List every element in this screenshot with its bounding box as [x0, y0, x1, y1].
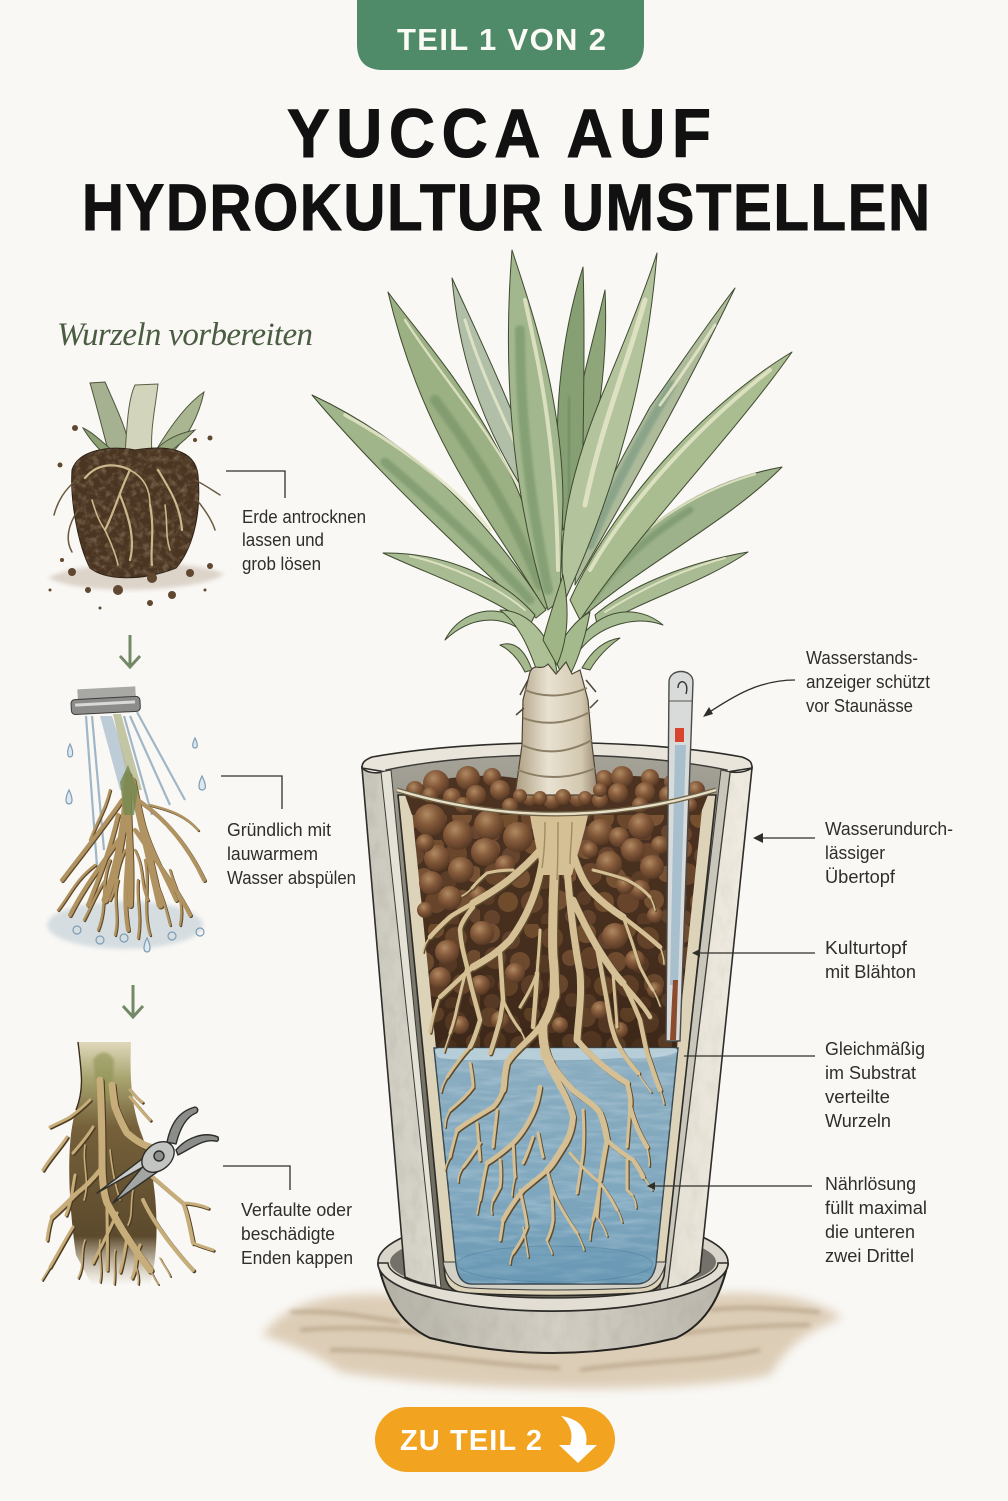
- clay pebbles body: [414, 804, 669, 1038]
- label: step 3: [241, 1200, 353, 1268]
- callout: water level indicator: Wasserstands-: [806, 648, 918, 668]
- wooden ground wash: [262, 1293, 842, 1388]
- button: to part 2: [375, 1407, 615, 1472]
- callout: nutrient solution: Nährlösung: [825, 1174, 916, 1194]
- callout: nutrient solution: füllt maximal: [825, 1198, 927, 1218]
- callout: water level indicator: [703, 648, 930, 717]
- nutrient solution: [434, 1048, 678, 1284]
- label: step 2: Gründlich mit: [227, 820, 331, 840]
- callout: culture pot: Kulturtopf: [825, 938, 908, 958]
- illustration: rinsing under shower: [47, 686, 205, 952]
- clay pebble substrate: [411, 800, 703, 1048]
- callout: outer pot: Übertopf: [825, 867, 896, 887]
- title: HYDROKULTUR UMSTELLEN: [82, 172, 930, 245]
- top badge: part 1 of 2: [357, 0, 644, 70]
- callout: water level indicator: vor Staunässe: [806, 696, 913, 716]
- icon: curved arrow down: [559, 1416, 597, 1463]
- trunk: [515, 662, 598, 795]
- leader line: step 2: [221, 776, 282, 809]
- pebbles over trunk base: [513, 783, 607, 805]
- illustration: dried root ball: [48, 382, 224, 610]
- title: [82, 96, 930, 245]
- pot cutaway: [362, 672, 752, 1353]
- outer wall inner liner right: [660, 770, 730, 1290]
- leader line: step 3: [223, 1166, 290, 1190]
- roots: [423, 815, 665, 1265]
- button: to part 2: ZU TEIL 2: [400, 1425, 542, 1457]
- culture pot rim: [397, 790, 716, 814]
- callout: water level indicator: anzeiger schützt: [806, 672, 930, 692]
- callout: evenly distributed roots: verteilte: [825, 1087, 890, 1107]
- label: step 1: [242, 507, 366, 574]
- pot inner cavity: [386, 755, 727, 1302]
- leaves: [312, 250, 792, 682]
- outer wall inner liner left: [381, 770, 441, 1288]
- callout: culture pot: mit Blähton: [825, 962, 916, 982]
- callout: nutrient solution: zwei Drittel: [825, 1246, 914, 1266]
- outer wall left section: [362, 768, 437, 1286]
- callout: culture pot: [692, 938, 916, 982]
- saucer back: [378, 1214, 728, 1310]
- clay pebbles surface: [405, 766, 708, 815]
- culture pot wall: [398, 795, 716, 1296]
- arrow: step 2 to 3: [123, 985, 143, 1017]
- label: step 3: Enden kappen: [241, 1248, 353, 1268]
- pot back rim: [362, 743, 752, 772]
- callout: nutrient solution: [647, 1174, 927, 1266]
- label: step 1: Erde antrocknen: [242, 507, 366, 527]
- yucca plant: [312, 250, 792, 805]
- callout: evenly distributed roots: [684, 1039, 925, 1131]
- outer wall right section: [667, 768, 752, 1290]
- label: step 2: Wasser abspülen: [227, 868, 356, 888]
- label: step 3: Verfaulte oder: [241, 1200, 352, 1220]
- water level indicator: [666, 672, 693, 1041]
- icon: garden shears: [97, 1107, 218, 1203]
- title: YUCCA AUF: [287, 96, 711, 173]
- illustration: cutting rotten root ends: [42, 1042, 218, 1285]
- top badge: part 1 of 2: TEIL 1 VON 2: [397, 22, 606, 57]
- arrow: step 1 to 2: [120, 635, 140, 667]
- callout: outer pot: [753, 819, 953, 887]
- label: step 2: [227, 820, 356, 888]
- leader line: step 1: [226, 471, 285, 498]
- callout: evenly distributed roots: Wurzeln: [825, 1111, 891, 1131]
- callout: nutrient solution: die unteren: [825, 1222, 915, 1242]
- label: step 1: grob lösen: [242, 554, 321, 574]
- callout: evenly distributed roots: im Substrat: [825, 1063, 916, 1083]
- label: step 1: lassen und: [242, 530, 324, 550]
- callout: outer pot: lässiger: [825, 843, 885, 863]
- culture pot base: [443, 1262, 666, 1290]
- saucer front: [378, 1263, 728, 1353]
- callout: outer pot: Wasserundurch-: [825, 819, 953, 839]
- section heading: roots preparation: Wurzeln vorbereiten: [57, 317, 313, 353]
- label: step 3: beschädigte: [241, 1224, 335, 1244]
- label: step 2: lauwarmem: [227, 844, 318, 864]
- callout: evenly distributed roots: Gleichmäßig: [825, 1039, 925, 1059]
